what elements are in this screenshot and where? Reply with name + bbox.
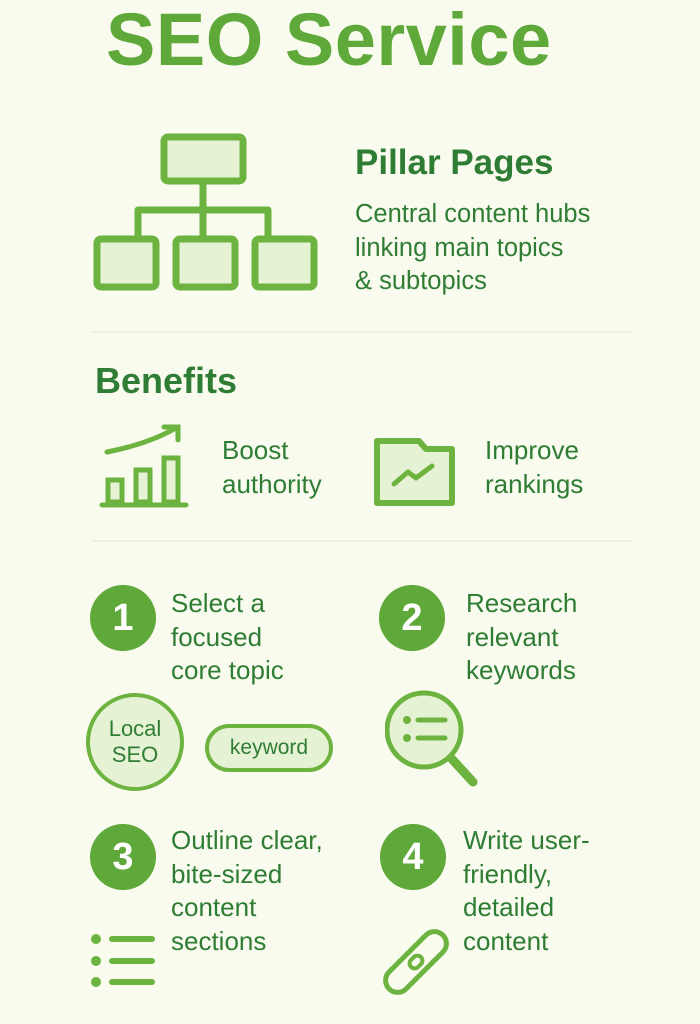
icon: list	[91, 934, 155, 987]
title: SEO Service	[106, 0, 552, 81]
text: step 4	[463, 825, 590, 956]
text: boost authority	[222, 435, 322, 498]
heading: Pillar Pages: Pillar Pages	[355, 143, 553, 182]
icon: site hierarchy	[94, 134, 318, 290]
text: step 1: core topic	[171, 655, 284, 685]
text: step 4: detailed	[463, 892, 554, 922]
text: boost authority: Boost	[222, 435, 288, 465]
text: step 2: relevant	[466, 622, 558, 652]
icon: magnifier	[385, 690, 478, 786]
text: step 1: Select a	[171, 588, 265, 618]
text: step 3: content	[171, 892, 256, 922]
text: step 2	[466, 588, 577, 685]
step 2	[379, 585, 577, 685]
text: step 4: content	[463, 926, 548, 956]
icon: link/pencil	[383, 929, 449, 995]
step 3	[90, 824, 323, 956]
text: step 3	[171, 825, 323, 956]
icon: growth chart	[100, 424, 188, 508]
icon: keyword pill	[205, 724, 333, 772]
text: step 2: keywords	[466, 655, 576, 685]
number 3	[90, 824, 156, 890]
text: step 3: bite-sized	[171, 858, 282, 888]
number 4	[380, 824, 446, 890]
icon: Local SEO badge	[86, 693, 184, 791]
text: boost authority: authority	[222, 468, 322, 498]
icon: folder with trend	[374, 438, 455, 506]
icon: Local SEO badge: SEO	[112, 742, 158, 767]
text: step 3: sections	[171, 926, 266, 956]
text: pillar description	[355, 200, 590, 295]
text: step 4: friendly,	[463, 858, 552, 888]
number 4: 4	[402, 836, 424, 878]
text: step 1: focused	[171, 622, 262, 652]
heading: Benefits: Benefits	[95, 360, 237, 401]
text: pillar description: & subtopics	[355, 267, 487, 295]
number 2	[379, 585, 445, 651]
text: improve rankings: Improve	[485, 435, 579, 465]
text: pillar description: Central content hubs	[355, 200, 590, 228]
text: pillar description: linking main topics	[355, 234, 563, 262]
text: improve rankings: rankings	[485, 468, 583, 498]
step 4	[380, 824, 590, 956]
icon: Local SEO badge: Local	[109, 716, 161, 741]
number 3: 3	[112, 836, 134, 878]
number 1: 1	[112, 597, 134, 639]
text: step 3: Outline clear,	[171, 825, 323, 855]
step 1	[90, 585, 284, 685]
icon: keyword pill: keyword	[230, 736, 308, 759]
text: step 1	[171, 588, 284, 685]
text: step 2: Research	[466, 588, 577, 618]
number 1	[90, 585, 156, 651]
number 2: 2	[401, 597, 423, 639]
text: improve rankings	[485, 435, 583, 498]
text: step 4: Write user-	[463, 825, 590, 855]
